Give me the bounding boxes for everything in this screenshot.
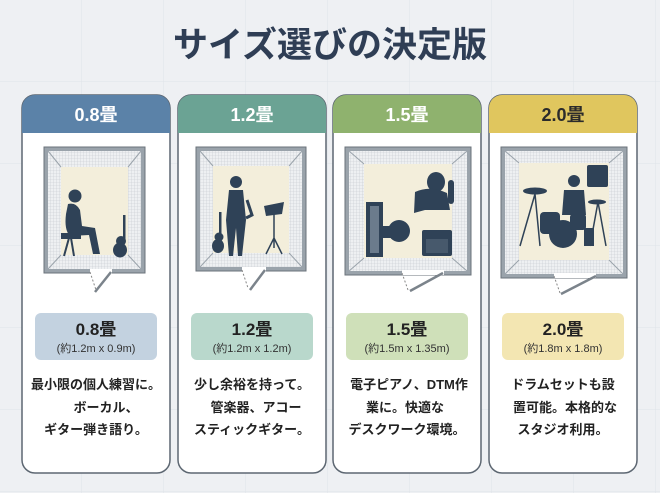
description 1.2: 少し余裕を持って。 xyxy=(194,377,310,392)
size label 0.8: (約1.2m x 0.9m) xyxy=(57,341,135,355)
room diagram 0.8 xyxy=(44,147,145,292)
size label 1.2: 1.2畳 xyxy=(232,320,272,339)
header: 0.8畳 xyxy=(22,95,170,133)
header: 0.8畳: 0.8畳 xyxy=(74,105,118,125)
silhouette: seated person & guitar xyxy=(62,190,127,258)
description 1.2: 管楽器、アコー xyxy=(210,400,302,415)
header: 1.5畳 xyxy=(333,95,481,133)
header: 2.0畳 xyxy=(489,95,637,133)
header: 1.2畳 xyxy=(178,95,326,133)
panel: 1.2畳 xyxy=(178,95,326,473)
size label 2.0: 2.0畳 xyxy=(543,320,583,339)
description 2.0: 置可能。本格的な xyxy=(513,400,617,415)
size label 1.2: (約1.2m x 1.2m) xyxy=(213,341,291,355)
description 0.8: ボーカル、 xyxy=(73,400,139,415)
silhouette: saxophone player, guitar, music stand xyxy=(212,176,284,256)
silhouette: keyboard, player, guitarist, amp xyxy=(366,172,454,257)
size label 2.0 xyxy=(502,313,624,360)
size label 0.8 xyxy=(35,313,157,360)
header: 2.0畳: 2.0畳 xyxy=(541,105,585,125)
panel: 0.8畳 xyxy=(22,95,170,473)
description 2.0: ドラムセットも設 xyxy=(511,377,615,392)
title: サイズ選びの決定版 xyxy=(173,25,487,65)
description 2.0 xyxy=(511,377,617,437)
panel: 1.5畳 xyxy=(333,95,481,473)
description 0.8: 最小限の個人練習に。 xyxy=(31,377,161,392)
room diagram 1.2 xyxy=(196,147,306,290)
panel: 2.0畳 xyxy=(489,95,637,473)
description 1.5: 業に。快適な xyxy=(366,400,444,415)
silhouette: drummer and drum kit, amp xyxy=(520,165,608,248)
description 0.8 xyxy=(31,377,161,437)
description 1.2: スティックギター。 xyxy=(194,422,310,437)
size label 2.0: (約1.8m x 1.8m) xyxy=(524,341,602,355)
description 1.2 xyxy=(194,377,310,437)
size label 1.5: 1.5畳 xyxy=(387,320,427,339)
description 0.8: ギター弾き語り。 xyxy=(44,422,148,437)
header: 1.5畳: 1.5畳 xyxy=(385,105,429,125)
size label 0.8: 0.8畳 xyxy=(76,320,116,339)
size label 1.2 xyxy=(191,313,313,360)
room diagram 2.0 xyxy=(501,147,627,294)
description 1.5: 電子ピアノ、DTM作 xyxy=(350,377,468,392)
description 1.5: デスクワーク環境。 xyxy=(348,422,466,437)
header: 1.2畳: 1.2畳 xyxy=(230,105,274,125)
room diagram 1.5 xyxy=(345,147,471,291)
description 1.5 xyxy=(348,377,468,437)
size label 1.5 xyxy=(346,313,468,360)
description 2.0: スタジオ利用。 xyxy=(517,422,609,437)
size label 1.5: (約1.5m x 1.35m) xyxy=(365,341,449,355)
